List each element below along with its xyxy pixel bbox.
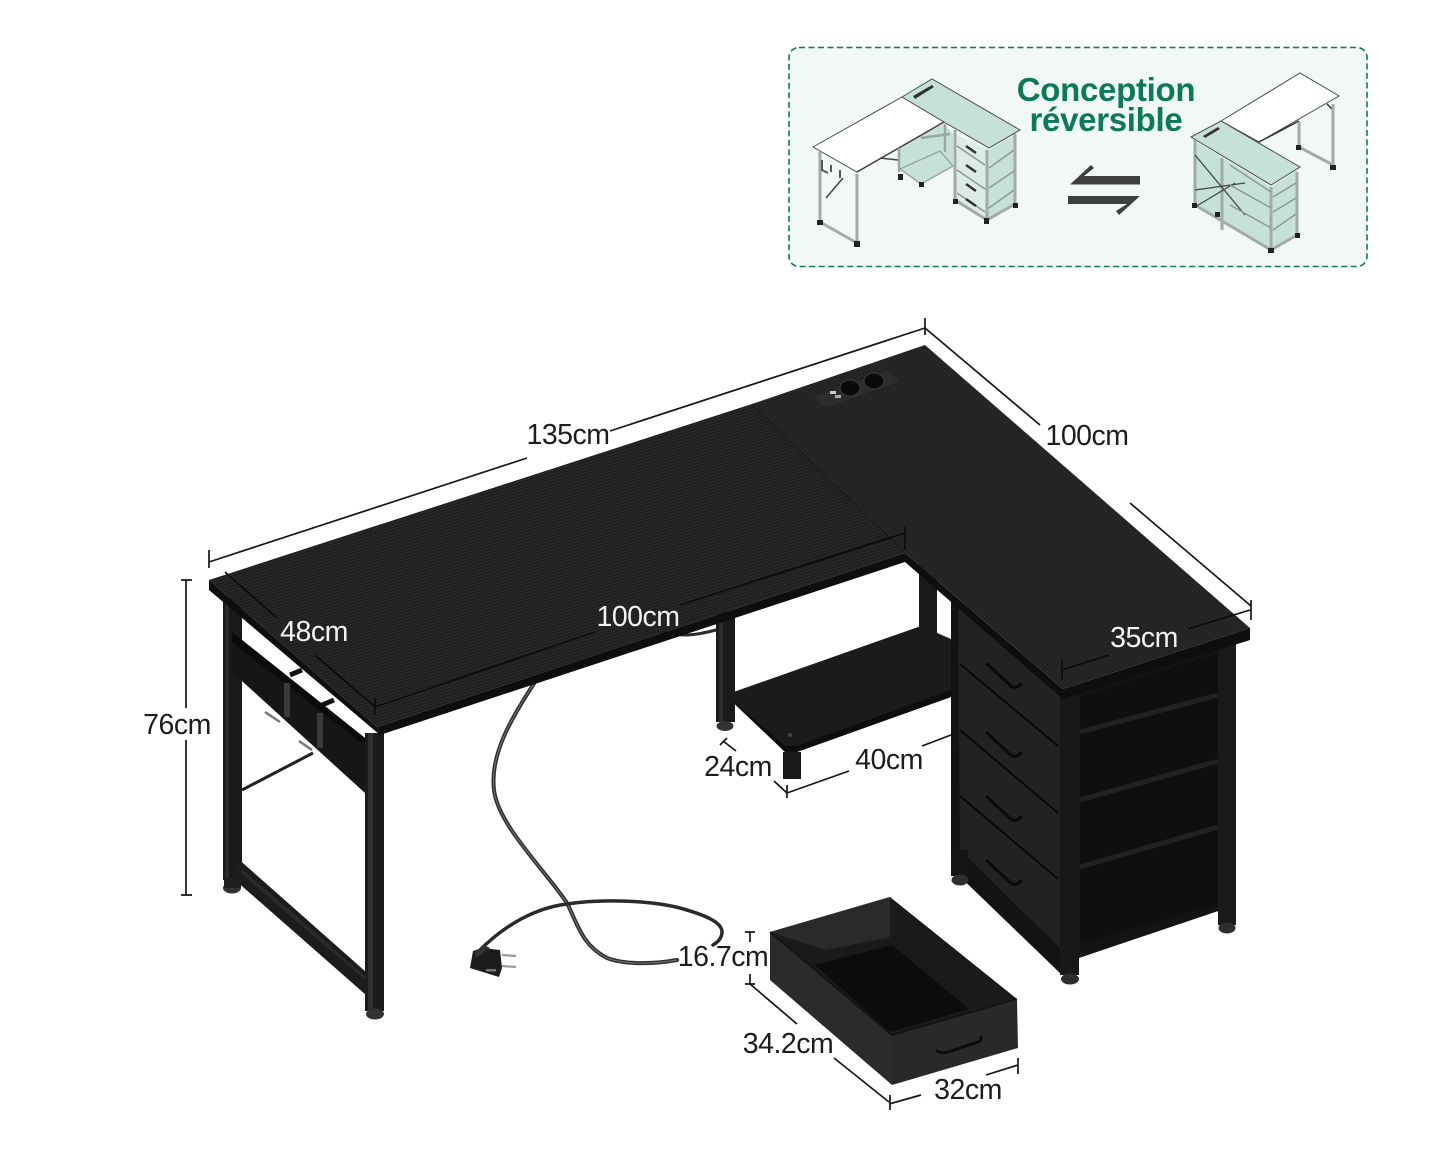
dimension: return width 35cm: 35cm — [1110, 622, 1178, 654]
cabinet feet — [1060, 690, 1079, 975]
shelf post — [919, 560, 937, 640]
dimension: overall depth 100cm — [925, 328, 1251, 620]
bottom rail — [235, 856, 366, 995]
dimension: height 76cm: 76cm — [143, 709, 211, 741]
dimension lines — [143, 318, 1251, 1110]
desk — [209, 345, 1250, 1020]
power outlet — [812, 370, 901, 408]
loose drawer — [770, 897, 1018, 1085]
dimension: overall width 135cm — [209, 318, 925, 568]
dimension: return width 35cm — [1062, 610, 1250, 680]
middle leg — [716, 612, 735, 731]
hooks — [265, 712, 312, 750]
dimension: inner length 100cm: 100cm — [596, 601, 680, 633]
dimension: height 76cm — [143, 580, 211, 895]
cabinet drawer fronts — [958, 608, 1060, 948]
heading: conception réversible — [1017, 71, 1195, 138]
dimension: shelf depth 24cm — [704, 738, 787, 793]
diagram: right-hand configuration — [1191, 73, 1339, 253]
cabinet drawer dividers — [960, 664, 1058, 879]
dimension: drawer width 32cm: 32cm — [934, 1074, 1002, 1106]
dimension: shelf width 40cm — [787, 735, 951, 798]
dimension: drawer depth 34.2cm: 34.2cm — [743, 1028, 833, 1060]
cabinet fabric side panel — [1080, 653, 1218, 943]
power cord — [480, 630, 722, 963]
dimension: drawer depth 34.2cm — [743, 984, 889, 1102]
apron storage bag — [232, 632, 365, 793]
drawer handles — [987, 664, 1021, 884]
dimension: drawer height 16.7cm: 16.7cm — [678, 941, 768, 973]
dimension: drawer height 16.7cm — [678, 932, 768, 984]
drawer cabinet — [951, 596, 1236, 984]
dimension: overall depth 100cm: 100cm — [1045, 420, 1129, 452]
dimension: drawer width 32cm — [889, 1058, 1018, 1110]
cabinet right side frame — [1062, 640, 1236, 960]
cross brace — [242, 753, 313, 790]
front leg — [365, 733, 384, 1020]
dimension: shelf width 40cm: 40cm — [855, 744, 923, 776]
desktop edge — [209, 553, 1250, 735]
power plug — [470, 945, 516, 977]
dimension: inner length 100cm — [375, 527, 905, 707]
desktop surface — [209, 345, 1250, 727]
dimension: desk depth 48cm: 48cm — [280, 616, 348, 648]
cabinet left frame — [951, 596, 1062, 975]
rear left leg — [223, 598, 242, 894]
dimension: overall width 135cm: 135cm — [526, 419, 610, 451]
lower shelf — [725, 626, 951, 779]
heading: conception réversible: Conception — [1017, 71, 1195, 108]
heading: conception réversible: réversible — [1030, 101, 1182, 138]
panel: reversible design — [789, 48, 1367, 266]
diagram: left-hand configuration — [813, 79, 1020, 247]
dimension: desk depth 48cm — [225, 572, 375, 715]
dimension: shelf depth 24cm: 24cm — [704, 751, 772, 783]
icon: reversible arrows — [1068, 165, 1140, 215]
